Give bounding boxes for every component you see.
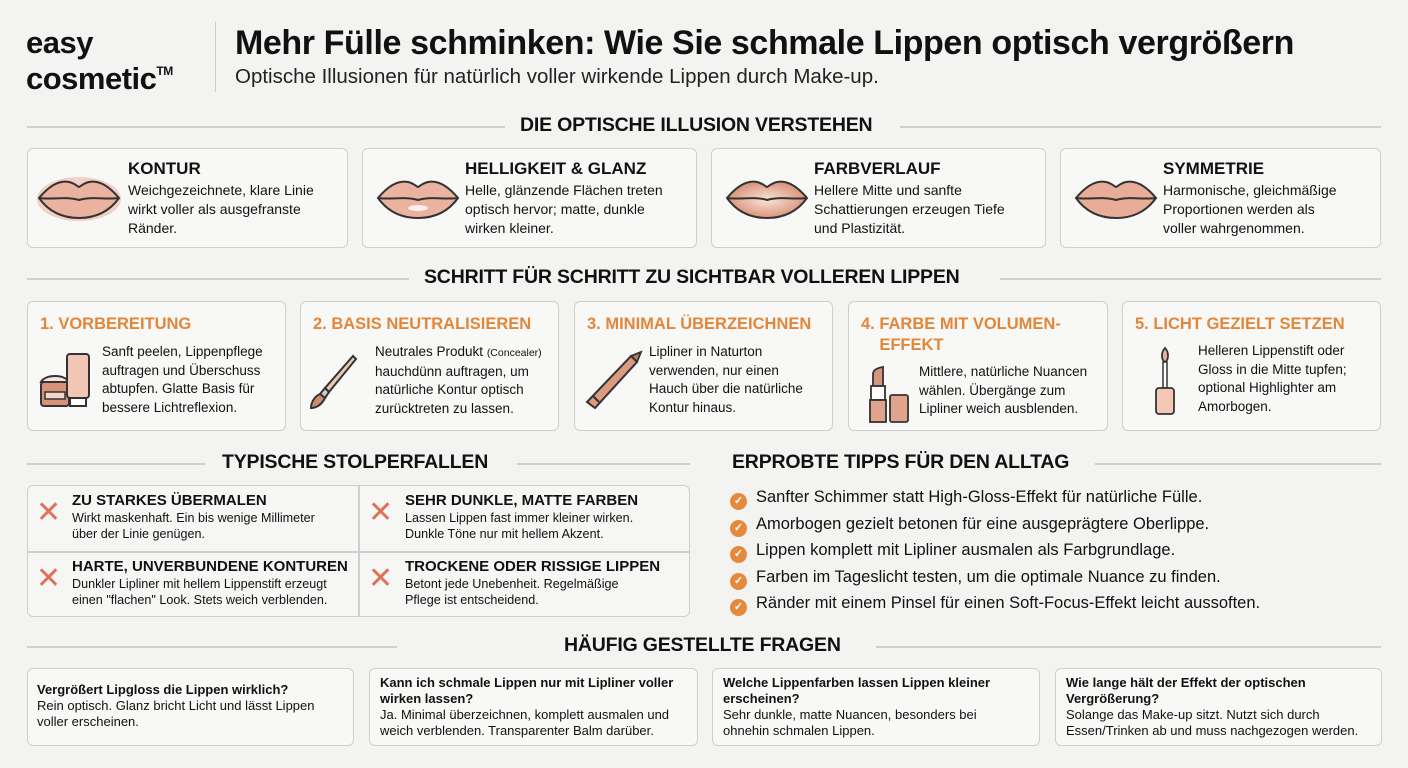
panel: step 2: natürliche Kontur optisch [375, 382, 524, 397]
pitfall 4: Betont jede Unebenheit. Regelmäßige [405, 577, 619, 591]
faq 3: ohnehin schmalen Lippen. [723, 723, 875, 738]
tips list: Ränder mit einem Pinsel für einen Soft-Focus-Effekt leicht aussoften. [756, 594, 1260, 612]
subtitle: Optische Illusionen für natürlich voller wirkende Lippen durch Make-up. [235, 65, 879, 88]
panel: helligkeit: Helle, glänzende Flächen treten [465, 182, 663, 198]
panel: step 1: 1. VORBEREITUNG [40, 315, 191, 333]
pitfall 3 [36, 558, 348, 607]
pitfall 4: TROCKENE ODER RISSIGE LIPPEN [405, 558, 660, 575]
panel: farbverlauf: Schattierungen erzeugen Tiefe [814, 201, 1005, 217]
panel: step 4: Lipliner weich ausblenden. [919, 401, 1078, 416]
panel: step 2: zurücktreten zu lassen. [375, 400, 514, 416]
panel: kontur: wirkt voller als ausgefranste [128, 201, 301, 217]
panel: kontur: KONTUR [128, 159, 201, 178]
panel: symmetrie: Harmonische, gleichmäßige [1163, 182, 1337, 198]
tips list: ✓ [734, 495, 743, 507]
faq 1: Rein optisch. Glanz bricht Licht und lässt Lippen [37, 698, 314, 713]
pitfall 3: HARTE, UNVERBUNDENE KONTUREN [72, 558, 348, 575]
faq 2: weich verblenden. Transparenter Balm darüber. [380, 723, 654, 738]
tips list: ✓ [734, 522, 743, 534]
panel: step 5: Amorbogen. [1198, 398, 1272, 414]
panel: step 5: Helleren Lippenstift oder [1198, 343, 1344, 358]
panel: step 3: Kontur hinaus. [649, 400, 736, 414]
pitfall 2: ✕ [368, 496, 393, 529]
faq 2: wirken lassen? [380, 691, 473, 706]
icon: lip pencil [586, 350, 642, 410]
panel: step 3: Lipliner in Naturton [649, 344, 762, 359]
panel: step 3: 3. MINIMAL ÜBERZEICHNEN [587, 315, 811, 333]
panel: farbverlauf [711, 148, 1046, 248]
panel: step 1: Sanft peelen, Lippenpflege [102, 344, 263, 359]
icon: brush [310, 354, 358, 409]
pitfall 3: Dunkler Lipliner mit hellem Lippenstift erzeugt [72, 577, 327, 591]
faq 2: Ja. Minimal überzeichnen, komplett ausmalen und [380, 707, 669, 722]
heading: tipps: ERPROBTE TIPPS FÜR DEN ALLTAG [732, 451, 1069, 473]
faq 3: erscheinen? [723, 691, 800, 706]
panel: symmetrie: voller wahrgenommen. [1163, 220, 1305, 236]
pitfall 1: ZU STARKES ÜBERMALEN [72, 492, 267, 509]
faq 1: Vergrößert Lipgloss die Lippen wirklich? [37, 682, 288, 697]
icon: lips glossy [376, 180, 460, 219]
tips list: Farben im Tageslicht testen, um die optimale Nuance zu finden. [756, 568, 1221, 586]
icon: lips blurred [37, 177, 121, 221]
pitfall 4 [368, 558, 660, 607]
panel: kontur: Weichgezeichnete, klare Linie [128, 182, 314, 198]
panel: step 4 [848, 301, 1108, 431]
logo [26, 25, 173, 96]
icon: lips gradient [726, 180, 808, 219]
panel: step 2 [300, 301, 559, 431]
panel: step 4: wählen. Übergänge zum [919, 382, 1065, 398]
faq 3 [712, 668, 1040, 746]
pitfall 1: Wirkt maskenhaft. Ein bis wenige Millimeter [72, 511, 315, 525]
pitfall 1: ✕ [36, 496, 61, 529]
tips list: ✓ [734, 575, 743, 587]
pitfall 2: Lassen Lippen fast immer kleiner wirken. [405, 511, 633, 525]
heading: stolperfallen: TYPISCHE STOLPERFALLEN [222, 451, 488, 473]
pitfall 3: einen "flachen" Look. Stets weich verblenden. [72, 593, 327, 607]
panel: symmetrie [1060, 148, 1381, 248]
panel: step 5: optional Highlighter am [1198, 380, 1336, 395]
logo: cosmeticTM [26, 61, 173, 96]
tips list: ✓ [734, 601, 743, 613]
tips list [730, 488, 1260, 616]
faq 4 [1055, 668, 1382, 746]
panel: step 1 [27, 301, 286, 431]
faq 1: voller erscheinen. [37, 714, 139, 729]
faq 3: Welche Lippenfarben lassen Lippen kleiner [723, 675, 990, 690]
panel: symmetrie: Proportionen werden als [1163, 201, 1315, 217]
tips list: Amorbogen gezielt betonen für eine ausgeprägtere Oberlippe. [756, 515, 1209, 533]
faq 1 [27, 668, 354, 746]
panel: kontur: Ränder. [128, 220, 177, 236]
panel: step 1: bessere Lichtreflexion. [102, 400, 237, 414]
pitfall 2 [368, 492, 638, 541]
icon: lipstick [869, 366, 909, 423]
panel: step 4: Mittlere, natürliche Nuancen [919, 364, 1087, 379]
faq 3: Sehr dunkle, matte Nuancen, besonders bei [723, 707, 977, 722]
pitfall 2: Dunkle Töne nur mit hellem Akzent. [405, 527, 604, 541]
tips list: Sanfter Schimmer statt High-Gloss-Effekt für natürliche Fülle. [756, 488, 1202, 506]
heading: schritt für schritt: SCHRITT FÜR SCHRITT ZU SICHTBAR VOLLEREN LIPPEN [424, 266, 960, 288]
tips list: Lippen komplett mit Lipliner ausmalen als Farbgrundlage. [756, 541, 1175, 559]
panel: helligkeit: optisch hervor; matte, dunkle [465, 201, 645, 217]
pitfall 2: SEHR DUNKLE, MATTE FARBEN [405, 492, 638, 509]
pitfall 4: ✕ [368, 562, 393, 595]
icon: gloss wand [1155, 346, 1175, 415]
panel: step 1: abtupfen. Glatte Basis für [102, 381, 254, 396]
faq 2 [369, 668, 698, 746]
logo: easy [26, 25, 93, 60]
panel: helligkeit: HELLIGKEIT & GLANZ [465, 159, 646, 178]
title: Mehr Fülle schminken: Wie Sie schmale Lippen optisch vergrößern [235, 24, 1294, 62]
panel: helligkeit [362, 148, 697, 248]
icon: lips symmetric [1074, 180, 1158, 219]
faq 2: Kann ich schmale Lippen nur mit Lipliner voller [380, 675, 673, 690]
heading: faq: HÄUFIG GESTELLTE FRAGEN [564, 634, 841, 656]
panel: farbverlauf: FARBVERLAUF [814, 159, 941, 178]
faq 4: Solange das Make-up sitzt. Nutzt sich durch [1066, 707, 1320, 722]
panel: step 2: hauchdünn auftragen, um [375, 364, 529, 378]
panel: step 2: 2. BASIS NEUTRALISIEREN [313, 315, 531, 333]
tips list: ✓ [734, 548, 743, 560]
panel: step 3 [574, 301, 833, 431]
pitfall 4: Pflege ist entscheidend. [405, 593, 539, 607]
panel: helligkeit: wirken kleiner. [465, 220, 554, 236]
panel: step 3: verwenden, nur einen [649, 362, 779, 378]
panel: step 1: auftragen und Überschuss [102, 362, 260, 378]
panel: step 4: EFFEKT [879, 336, 944, 354]
panel: step 5 [1122, 301, 1381, 431]
panel: farbverlauf: Hellere Mitte und sanfte [814, 182, 962, 198]
icon: cream jar and tube [39, 353, 90, 407]
faq 4: Wie lange hält der Effekt der optischen [1066, 675, 1306, 690]
panel: kontur [27, 148, 348, 248]
panel: farbverlauf: und Plastizität. [814, 220, 905, 236]
panel: step 2: Neutrales Produkt (Concealer) [375, 344, 542, 359]
faq 4: Vergrößerung? [1066, 691, 1159, 706]
heading: optische illusion: DIE OPTISCHE ILLUSION VERSTEHEN [520, 114, 872, 136]
faq 4: Essen/Trinken ab und muss nachgezogen werden. [1066, 723, 1358, 738]
panel: step 4: 4. FARBE MIT VOLUMEN- [861, 315, 1061, 333]
pitfall 3: ✕ [36, 562, 61, 595]
panel: step 5: Gloss in die Mitte tupfen; [1198, 362, 1347, 376]
panel: symmetrie: SYMMETRIE [1163, 159, 1264, 178]
pitfall 1: über der Linie genügen. [72, 527, 205, 541]
panel: pitfalls grid [27, 485, 690, 617]
panel: step 3: Hauch über die natürliche [649, 381, 803, 396]
panel: step 5: 5. LICHT GEZIELT SETZEN [1135, 315, 1345, 333]
pitfall 1 [36, 492, 315, 541]
